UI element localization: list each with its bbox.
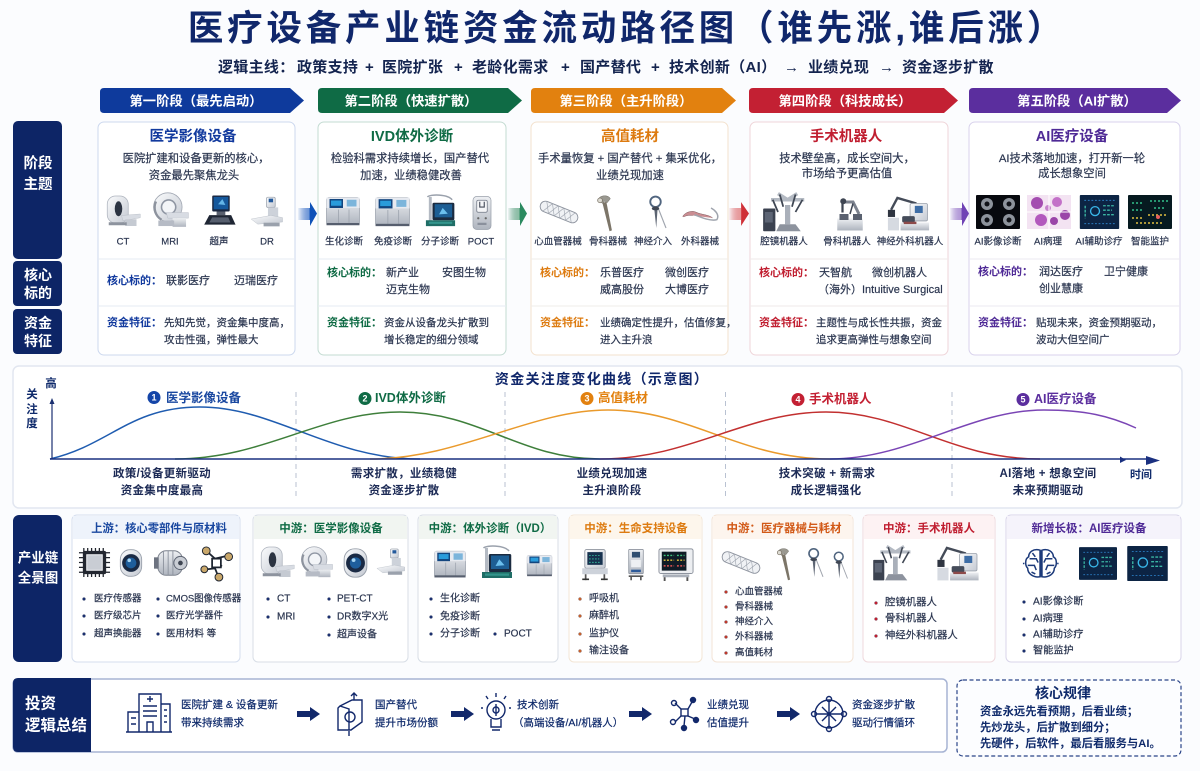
product list: 神经介入: [735, 616, 774, 628]
AI labels: AI病理: [1034, 236, 1062, 248]
row label: stage theme: [13, 121, 62, 259]
panel: midstream life support: 中游：生命支持设备: [584, 521, 688, 535]
product list: 骨科器械: [735, 600, 774, 612]
AI screens: [976, 195, 1172, 229]
component list: CMOS图像传感器: [166, 592, 242, 604]
modality list: 超声设备: [337, 628, 377, 640]
device labels: 外科器械: [681, 236, 719, 248]
step 3 text: [513, 698, 623, 729]
row label: core targets: 标的: [24, 285, 52, 301]
step 2 text: 提升市场份额: [375, 716, 438, 729]
step 3 text: 技术创新: [517, 698, 559, 711]
step 5 text: 驱动行情循环: [852, 716, 915, 729]
description: 医院扩建和设备更新的核心，: [123, 151, 269, 165]
callout: core rule: 先硬件，后软件，最后看服务与AI。: [980, 736, 1161, 750]
chart title: 资金关注度变化曲线（示意图）: [495, 371, 709, 387]
panel: midstream medical imaging: 中游：医学影像设备: [279, 521, 383, 535]
capital traits: 追求更高弹性与想象空间: [816, 333, 932, 346]
phase notes: 资金集中度最高: [121, 483, 203, 497]
AI list: AI影像诊断: [1033, 594, 1083, 608]
subtitle: logic main line: [218, 58, 994, 76]
device icons: [326, 195, 491, 230]
capital traits: 资金特征：: [759, 315, 814, 329]
AI labels: AI影像诊断: [975, 236, 1022, 248]
subtitle: logic main line: 业绩兑现: [808, 58, 869, 76]
stage arrow: stage 3: 第三阶段（主升阶段）: [560, 92, 692, 108]
step 1 text: 带来持续需求: [181, 716, 244, 729]
icons: [434, 546, 552, 578]
assay list: 生化诊断: [440, 592, 480, 604]
stage arrow: stage 5: 第五阶段（AI扩散）: [1017, 92, 1137, 108]
subtitle: logic main line: 技术创新（AI）: [669, 58, 776, 76]
curve label 1: 1: [151, 392, 157, 402]
label: [25, 694, 87, 734]
subtitle: logic main line: +: [365, 58, 374, 76]
panel: midstream devices and consumables: 中游：医疗器械与耗材: [726, 521, 842, 535]
device labels: 神经外科机器人: [877, 236, 944, 248]
arrow: stage 2 to 3: [508, 202, 527, 226]
panel: stage 5 AI medical devices: [969, 122, 1180, 355]
device labels: CT: [117, 236, 130, 248]
core targets: 联影医疗: [166, 273, 210, 287]
panel: midstream medical imaging: [253, 515, 408, 662]
capital traits: 波动大但空间广: [1036, 333, 1110, 346]
robot list: [874, 596, 958, 642]
robot list: 腔镜机器人: [885, 596, 938, 608]
label: 逻辑总结: [25, 716, 87, 734]
curve label 3: 3: [584, 394, 590, 404]
AI labels: [975, 236, 1169, 248]
capital traits: [978, 315, 1162, 346]
phase notes: 资金逐步扩散: [369, 483, 440, 497]
panel: investment logic summary: [13, 678, 947, 752]
equipment list: 输注设备: [589, 644, 629, 656]
subtitle: logic main line: 医院扩张: [382, 58, 443, 76]
description: [538, 151, 722, 182]
description: AI技术落地加速，打开新一轮: [999, 151, 1145, 165]
core targets: [327, 265, 486, 296]
robot list: 骨科机器人: [885, 612, 938, 624]
step 2 text: [375, 698, 438, 729]
AI list: AI病理: [1033, 612, 1063, 624]
phase notes: 技术突破 + 新需求: [779, 466, 876, 480]
modality list: DR数字X光: [337, 610, 388, 622]
device labels: [117, 236, 274, 248]
core targets: 润达医疗: [1039, 264, 1083, 278]
description: [331, 151, 489, 182]
panel: new growth pole AI devices: 新增长极：AI医疗设备: [1032, 521, 1147, 535]
stage arrow: stage 4: [749, 88, 958, 113]
capital traits: [540, 315, 736, 346]
stage arrow: stage 5: [969, 88, 1181, 113]
core targets: 威高股份: [600, 282, 644, 296]
row label: capital traits: 特征: [24, 333, 52, 349]
stage arrow: stage 2: [318, 88, 522, 113]
modality list: CT: [277, 594, 290, 604]
step 1 text: 医院扩建 & 设备更新: [181, 698, 278, 711]
row label: core targets: 核心: [24, 267, 52, 283]
panel: capital attention curve: [13, 366, 1182, 508]
capital traits: 进入主升浪: [600, 333, 653, 346]
curve label 2: IVD体外诊断: [375, 390, 446, 405]
panel: stage 1 medical imaging: [98, 122, 295, 355]
row label: core targets: [13, 261, 62, 306]
capital traits: 资金从设备龙头扩散到: [384, 316, 489, 329]
product list: 高值耗材: [735, 646, 774, 658]
capital traits: 资金特征：: [107, 315, 162, 329]
assay list: 免疫诊断: [440, 610, 480, 622]
product list: [724, 586, 783, 658]
description: [999, 151, 1145, 180]
component list: 医疗级芯片: [94, 610, 142, 622]
device labels: [760, 236, 944, 248]
device labels: 分子诊断: [421, 236, 459, 248]
phase notes: 未来预期驱动: [1013, 483, 1083, 497]
row label: capital traits: [13, 309, 62, 354]
icon: light bulb: [481, 693, 511, 730]
description: 加速，业绩稳健改善: [360, 168, 462, 182]
row label: industry chain panorama: 全景图: [18, 570, 58, 586]
description: 资金最先聚焦龙头: [149, 168, 239, 182]
assay list: POCT: [504, 628, 532, 640]
device labels: POCT: [468, 236, 494, 248]
label: 投资: [25, 694, 56, 712]
capital traits: 资金特征：: [978, 315, 1033, 329]
heading: AI医疗设备: [1036, 127, 1109, 145]
core targets: 大博医疗: [665, 282, 709, 296]
phase notes: 业绩兑现加速: [577, 466, 648, 480]
description: 手术量恢复 + 国产替代 + 集采优化，: [538, 151, 722, 165]
panel: midstream life support: [569, 515, 702, 662]
arrow: [629, 707, 652, 721]
core targets: 乐普医疗: [600, 265, 644, 279]
equipment list: 呼吸机: [589, 592, 619, 604]
capital traits: [327, 315, 489, 346]
AI list: [1022, 594, 1083, 656]
core targets: 迈瑞医疗: [234, 273, 278, 287]
core targets: [978, 264, 1148, 295]
core targets: 核心标的：: [978, 264, 1033, 278]
curve label 3: 高值耗材: [598, 390, 649, 405]
modality list: MRI: [277, 612, 295, 622]
core targets: [759, 265, 943, 296]
core targets: 核心标的：: [759, 265, 814, 279]
device labels: MRI: [161, 236, 179, 248]
stage arrow: stage 2: 第二阶段（快速扩散）: [345, 92, 477, 108]
AI list: 智能监护: [1033, 644, 1074, 656]
device labels: 骨科机器人: [823, 236, 871, 248]
arrow: [297, 707, 320, 721]
description: [123, 151, 269, 182]
curve label 5: AI医疗设备: [1034, 391, 1097, 406]
core targets: 创业慧康: [1039, 281, 1083, 295]
row label: stage theme: 主题: [24, 175, 53, 193]
core targets: 新产业: [386, 265, 419, 279]
icon: network: [670, 698, 698, 730]
icon: domestic substitution cube: [338, 693, 362, 736]
capital traits: [759, 315, 942, 346]
icons: [721, 549, 848, 580]
callout: core rule: [957, 680, 1181, 756]
description: 技术壁垒高，成长空间大，: [779, 151, 915, 165]
product list: 外科器械: [735, 630, 774, 642]
stage arrow: stage 4: 第四阶段（科技成长）: [779, 92, 911, 108]
core targets: 核心标的：: [540, 265, 595, 279]
panel: midstream devices and consumables: [712, 515, 853, 662]
stage arrow: stage 1: 第一阶段（最先启动）: [130, 92, 262, 108]
axes: [50, 398, 1160, 465]
description: [779, 151, 915, 180]
heading: 医学影像设备: [150, 127, 237, 145]
device labels: 骨科器械: [589, 236, 627, 248]
heading: IVD体外诊断: [371, 127, 454, 145]
callout: core rule: 资金永远先看预期，后看业绩；: [980, 704, 1138, 718]
core targets: 卫宁健康: [1104, 264, 1148, 278]
phase notes: 成长逻辑强化: [791, 483, 862, 497]
device labels: 免疫诊断: [374, 236, 412, 248]
component list: 医疗传感器: [94, 592, 142, 604]
AI list: AI辅助诊疗: [1033, 628, 1083, 640]
description: 市场给予更高估值: [802, 166, 892, 180]
step 4 text: [707, 698, 749, 729]
stage arrow: stage 1: [100, 88, 304, 113]
subtitle: logic main line: 国产替代: [580, 58, 641, 76]
panel: midstream IVD: 中游：体外诊断（IVD）: [429, 521, 551, 535]
callout: core rule: 核心规律: [1035, 685, 1091, 701]
step 5 text: [852, 698, 915, 729]
axis labels: 高: [45, 376, 57, 390]
callout: core rule: 先炒龙头，后扩散到细分；: [980, 720, 1116, 734]
row label: industry chain panorama: [13, 515, 62, 662]
AI labels: AI辅助诊疗: [1076, 236, 1123, 248]
panel: upstream components: [72, 515, 242, 662]
device labels: 生化诊断: [325, 236, 363, 248]
equipment list: 监护仪: [589, 626, 619, 640]
curve label 3: [580, 390, 649, 405]
core targets: 天智航: [819, 265, 852, 279]
panel: midstream surgical robots: 中游：手术机器人: [883, 521, 975, 535]
capital traits: 先知先觉，资金集中度高，: [164, 316, 290, 329]
device labels: [534, 236, 719, 248]
core targets: 微创机器人: [872, 265, 927, 279]
row label: stage theme: 阶段: [24, 154, 53, 172]
panel: midstream IVD: [418, 515, 558, 662]
capital traits: 增长稳定的细分领域: [384, 333, 479, 346]
panel: stage 2 IVD: [318, 122, 506, 355]
curve label 2: 2: [362, 394, 368, 404]
description: 成长想象空间: [1038, 166, 1106, 180]
row label: capital traits: 资金: [24, 315, 52, 331]
step 4 text: 估值提升: [707, 716, 749, 729]
device labels: [325, 236, 494, 248]
core targets: [107, 273, 278, 287]
panel: midstream surgical robots: [863, 515, 995, 662]
component list: 超声换能器: [94, 628, 142, 640]
phase notes: 需求扩散，业绩稳健: [351, 466, 457, 480]
device icons: [107, 193, 283, 227]
description: 检验科需求持续增长，国产替代: [331, 151, 489, 165]
icons: [261, 547, 405, 577]
arrow: [451, 707, 474, 721]
capital traits: 业绩确定性提升，估值修复，: [600, 316, 736, 329]
curve label 5: 5: [1020, 394, 1026, 404]
core targets: 核心标的：: [107, 273, 162, 287]
AI labels: 智能监护: [1131, 236, 1169, 248]
curve label 1: 医学影像设备: [166, 390, 242, 405]
subtitle: logic main line: 资金逐步扩散: [902, 58, 994, 76]
step 3 text: （高端设备/AI/机器人）: [513, 716, 623, 729]
curve label 4: 4: [795, 394, 801, 404]
icons: [79, 547, 233, 581]
capital traits: 资金特征：: [327, 315, 382, 329]
assay list: 分子诊断: [440, 626, 480, 640]
subtitle: logic main line: +: [454, 58, 463, 76]
description: 业绩兑现加速: [596, 168, 664, 182]
arrow: stage 4 to 5: [950, 202, 969, 226]
panel: stage 3 high-value consumables: [531, 122, 736, 355]
step 4 text: 业绩兑现: [707, 698, 749, 711]
assay list: [430, 592, 532, 640]
equipment list: 麻醉机: [589, 608, 619, 622]
core targets: 安图生物: [442, 265, 486, 279]
device labels: DR: [260, 236, 274, 248]
core targets: [540, 265, 709, 296]
capital traits: 攻击性强，弹性最大: [164, 333, 259, 346]
device labels: 腔镜机器人: [760, 236, 808, 248]
product list: 心血管器械: [735, 586, 783, 598]
subtitle: logic main line: →: [784, 58, 799, 76]
panel: new growth pole AI devices: [1006, 515, 1181, 662]
axis labels: 时间: [1130, 467, 1152, 481]
subtitle: logic main line: +: [561, 58, 570, 76]
device icons: [539, 196, 718, 231]
capital traits: [107, 315, 290, 346]
robot list: 神经外科机器人: [885, 628, 958, 642]
device labels: 超声: [209, 236, 229, 248]
step 1 text: [181, 698, 278, 729]
phase notes: 主升浪阶段: [582, 483, 642, 497]
core targets: 微创医疗: [665, 265, 709, 279]
curve label 4: 手术机器人: [809, 391, 872, 406]
component list: 医用材料 等: [166, 628, 217, 640]
heading: 手术机器人: [810, 128, 883, 145]
subtitle: logic main line: →: [879, 58, 894, 76]
modality list: [266, 594, 388, 640]
title: 医疗设备产业链资金流动路径图（谁先涨,谁后涨）: [188, 8, 1066, 48]
axis labels: [26, 376, 1152, 481]
arrow: stage 1 to 2: [298, 202, 317, 226]
axis labels: 注: [26, 402, 38, 416]
heading: 高值耗材: [601, 127, 659, 145]
step 5 text: 资金逐步扩散: [852, 698, 915, 711]
panel: stage 4 surgical robots: [750, 122, 948, 355]
subtitle: logic main line: 老龄化需求: [472, 58, 549, 76]
component list: 医疗光学器件: [166, 610, 224, 622]
device labels: 心血管器械: [534, 236, 582, 248]
component list: [82, 592, 242, 640]
icon: hospital: [126, 694, 172, 732]
axis labels: 关: [26, 387, 38, 401]
subtitle: logic main line: +: [651, 58, 660, 76]
modality list: PET-CT: [337, 594, 373, 604]
subtitle: logic main line: 政策支持: [297, 58, 358, 76]
phase notes: AI落地 + 想象空间: [1000, 466, 1096, 480]
core targets: 核心标的：: [327, 265, 382, 279]
arrow: stage 3 to 4: [729, 202, 749, 226]
arrow: [777, 707, 800, 721]
panel: upstream components: 上游：核心零部件与原材料: [91, 521, 227, 535]
capital traits: 贴现未来，资金预期驱动，: [1036, 316, 1162, 329]
equipment list: [578, 592, 629, 656]
device labels: 神经介入: [634, 236, 672, 248]
phase notes: [113, 466, 1096, 497]
icons: [873, 546, 979, 580]
icons: [582, 549, 693, 581]
subtitle: logic main line: 逻辑主线：: [218, 58, 295, 76]
capital traits: 资金特征：: [540, 315, 595, 329]
step 2 text: 国产替代: [375, 698, 417, 711]
core targets: 迈克生物: [386, 282, 430, 296]
axis labels: 度: [26, 416, 38, 430]
icon: capital diffusion circle: [812, 696, 846, 732]
capital traits: 主题性与成长性共振，资金: [816, 316, 942, 329]
curves: [50, 407, 1136, 459]
icons: [1023, 546, 1168, 581]
stage arrow: stage 3: [531, 88, 736, 113]
device icons: [763, 194, 929, 231]
row label: industry chain panorama: 产业链: [18, 550, 59, 566]
phase notes: 政策/设备更新驱动: [113, 466, 211, 480]
core targets: （海外）Intuitive Surgical: [818, 282, 943, 296]
